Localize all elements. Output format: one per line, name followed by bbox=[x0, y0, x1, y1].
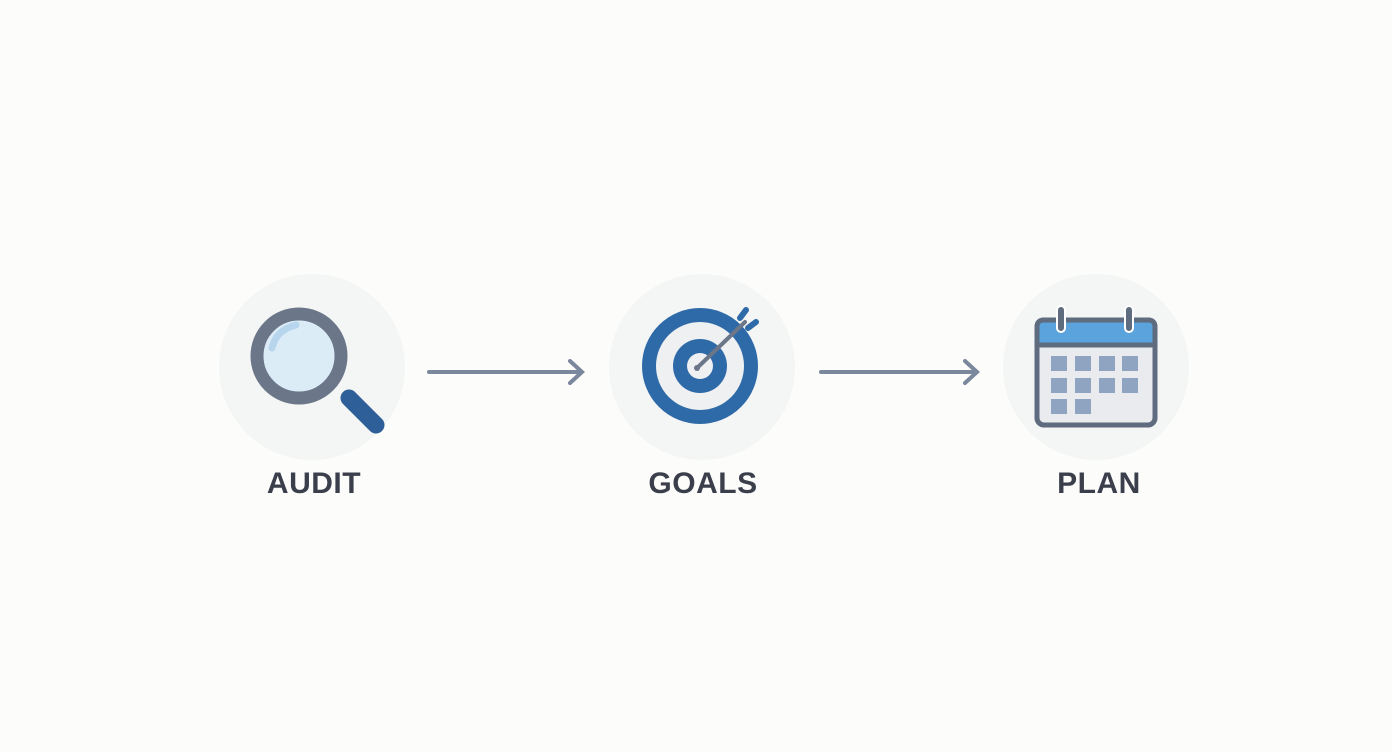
arrow: audit to goals bbox=[429, 361, 582, 383]
label: goals: GOALS bbox=[648, 467, 758, 500]
arrow: goals to plan bbox=[821, 361, 977, 383]
label: audit: AUDIT bbox=[267, 467, 361, 500]
step: plan icon bbox=[1003, 274, 1189, 460]
step: audit icon bbox=[219, 274, 405, 460]
step: goals icon bbox=[609, 274, 795, 460]
label: plan: PLAN bbox=[1057, 467, 1141, 500]
